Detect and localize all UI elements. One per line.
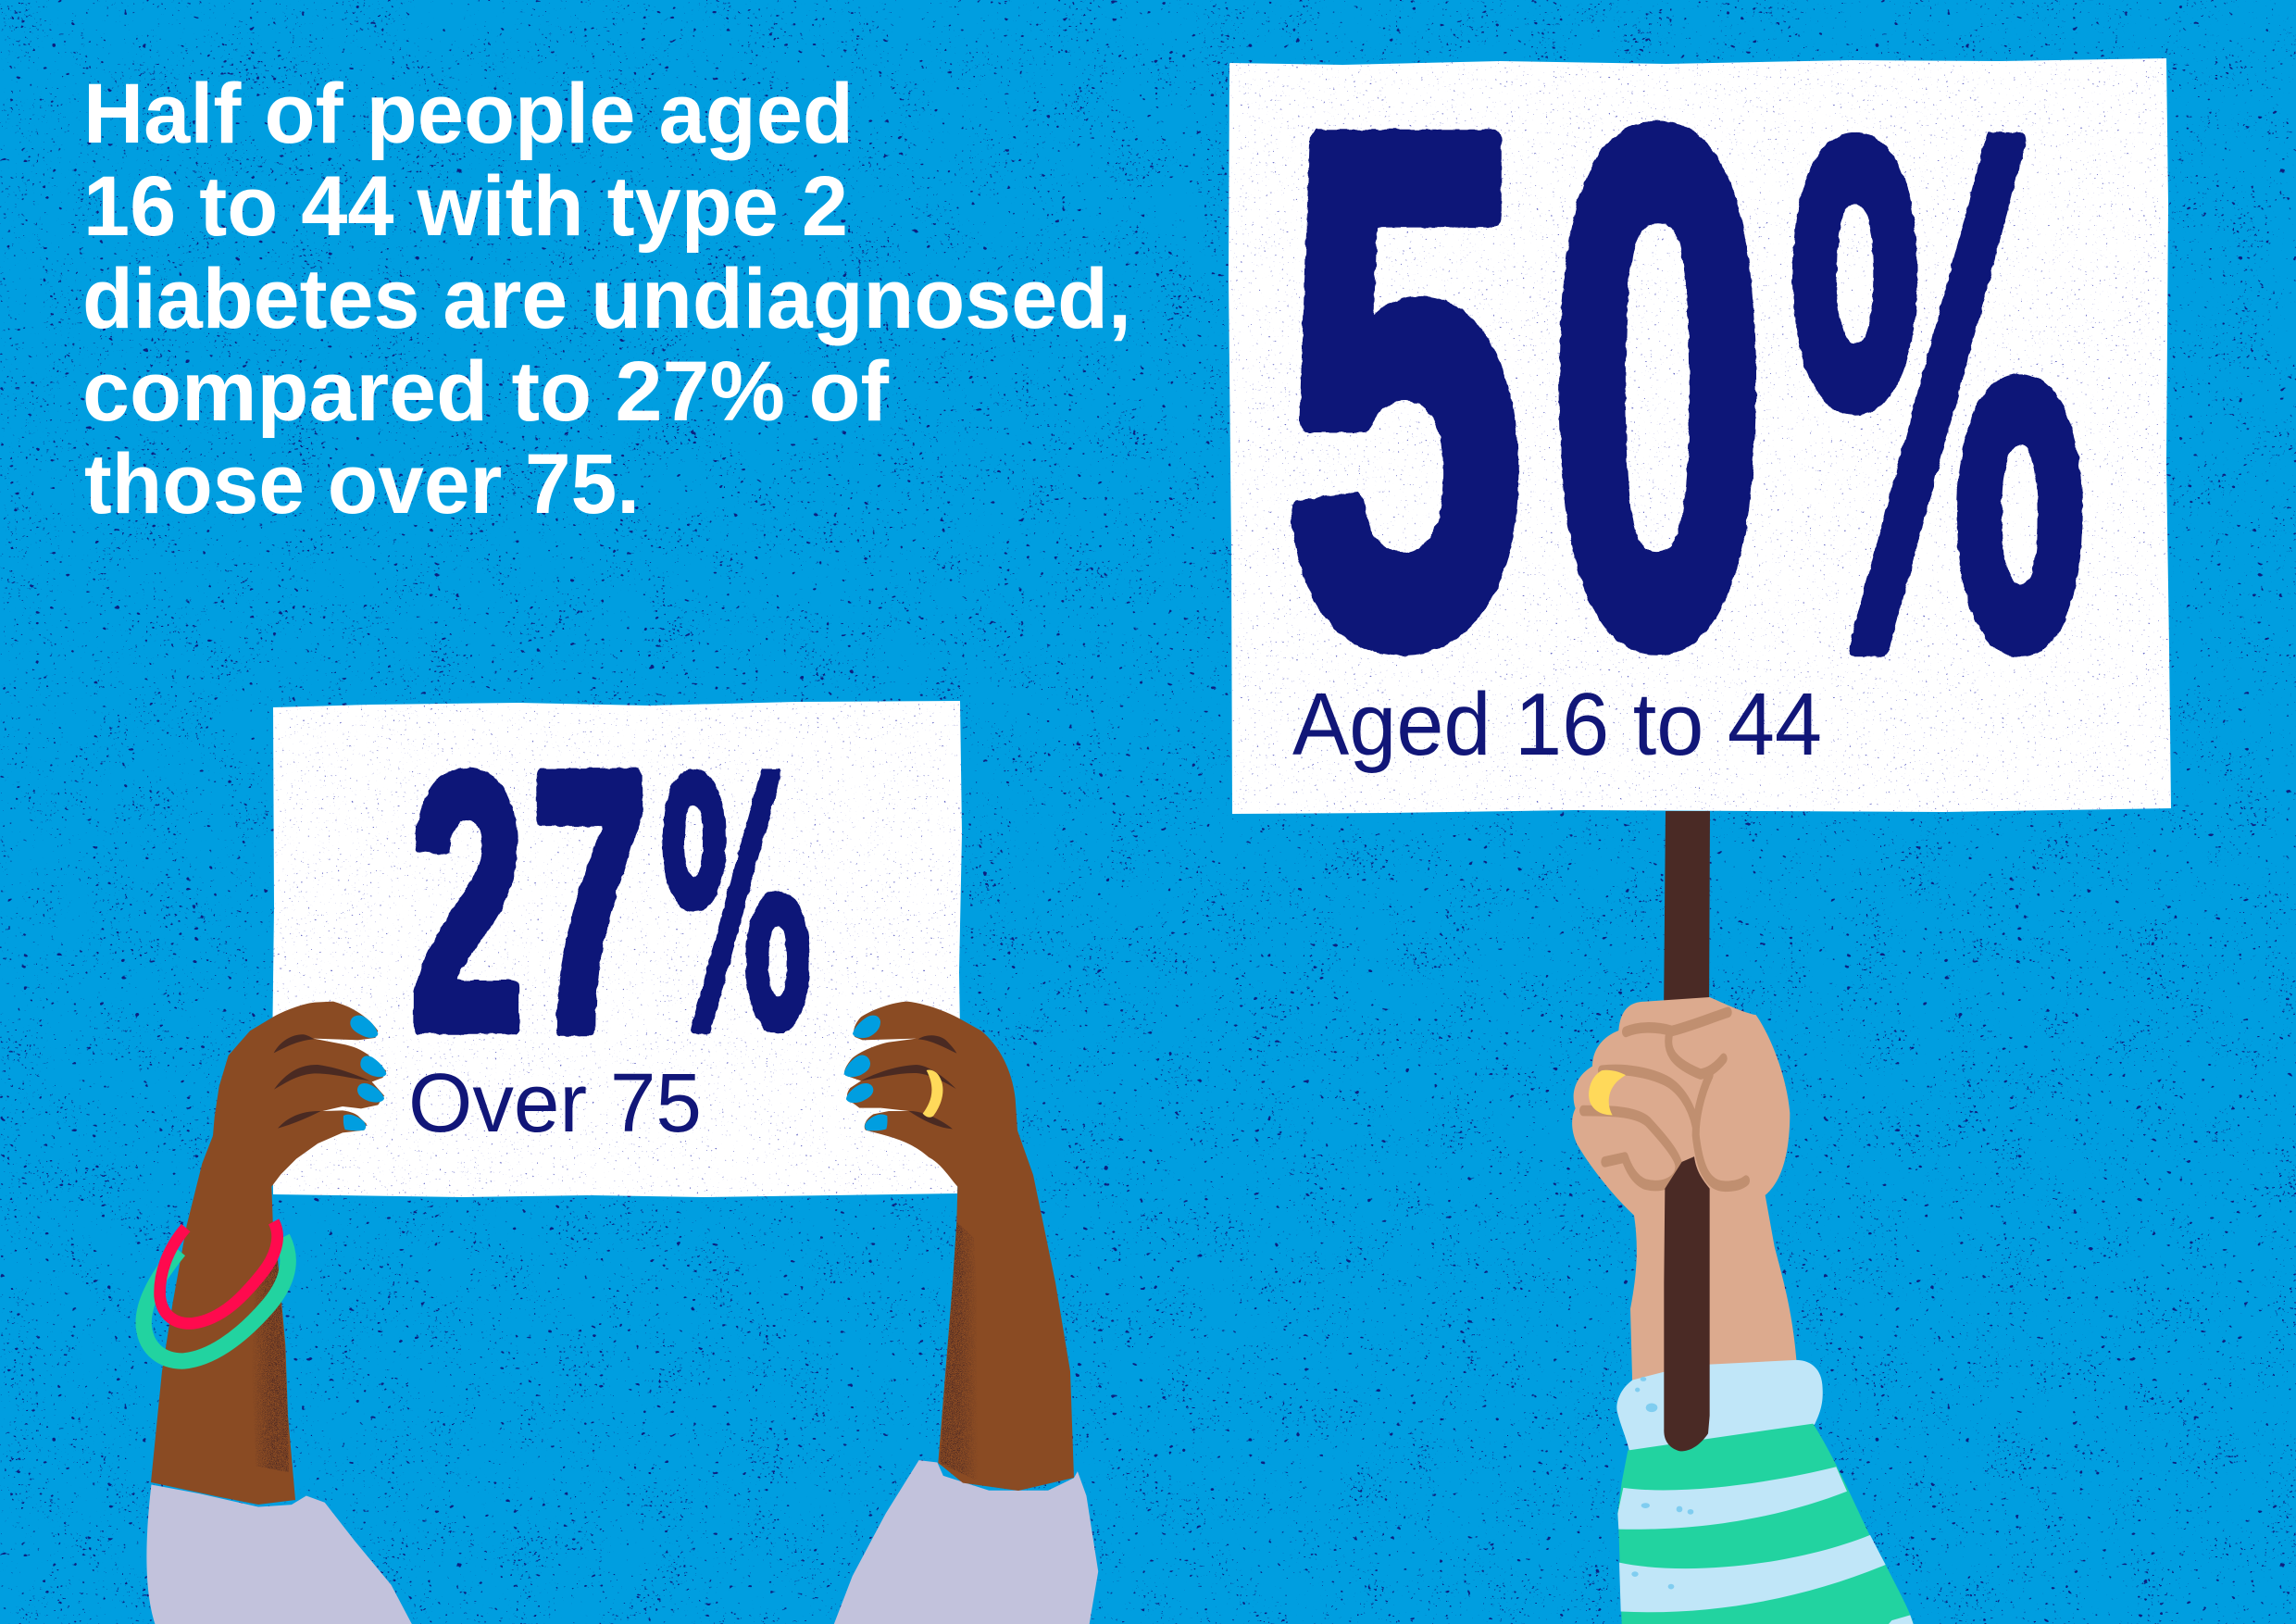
red bangle — [160, 1221, 278, 1323]
arm shading — [940, 1222, 979, 1481]
finger creases — [861, 1035, 956, 1129]
arm and fingers — [151, 1002, 386, 1505]
big figure: 27% — [410, 697, 813, 1106]
big figure: 27%: 7 — [532, 697, 646, 1106]
big figure: 27%: 2 — [410, 701, 524, 1106]
left arm and hand — [144, 1002, 386, 1505]
yellow ring — [923, 1069, 942, 1118]
headline text: compared to 27% of — [82, 344, 889, 439]
fingernails — [343, 1016, 386, 1131]
green bangle — [144, 1238, 288, 1361]
big figure: 50%: % — [1787, 18, 2088, 798]
knuckle and finger creases — [1583, 1012, 1746, 1186]
placard pole, front part — [1664, 1156, 1710, 1451]
big figure: 27%: % — [659, 709, 813, 1105]
headline text — [82, 67, 1131, 531]
caption: Over 75: Over 75 — [408, 1057, 702, 1150]
striped sleeve — [1617, 1377, 1914, 1624]
yellow ring on finger — [1589, 1070, 1626, 1115]
right sleeve — [834, 1460, 1098, 1624]
headline text: Half of people aged — [83, 67, 854, 161]
fingernails — [844, 1016, 888, 1131]
left sleeve — [146, 1485, 412, 1624]
placard pole, upper part — [1664, 811, 1710, 1018]
right arm and hand — [844, 1002, 1074, 1491]
placard: 50% aged 16 to 44 — [1229, 0, 2171, 814]
headline text: 16 to 44 with type 2 — [83, 159, 848, 254]
big figure: 50% — [1285, 0, 2088, 798]
headline text: diabetes are undiagnosed, — [82, 252, 1131, 346]
headline text: those over 75. — [84, 437, 640, 531]
raised arm holding the pole — [1572, 997, 1914, 1624]
finger creases — [274, 1034, 369, 1129]
raised arm and fist — [1572, 997, 1797, 1389]
big figure: 50%: 5 — [1285, 0, 1523, 789]
arm shading — [252, 1243, 289, 1472]
arm and fingers — [844, 1002, 1074, 1491]
placard: 27% over 75 — [272, 697, 962, 1197]
caption: Aged 16 to 44: Aged 16 to 44 — [1292, 675, 1822, 774]
big figure: 50%: 0 — [1551, 0, 1765, 788]
striped cuff — [1616, 1360, 1823, 1451]
